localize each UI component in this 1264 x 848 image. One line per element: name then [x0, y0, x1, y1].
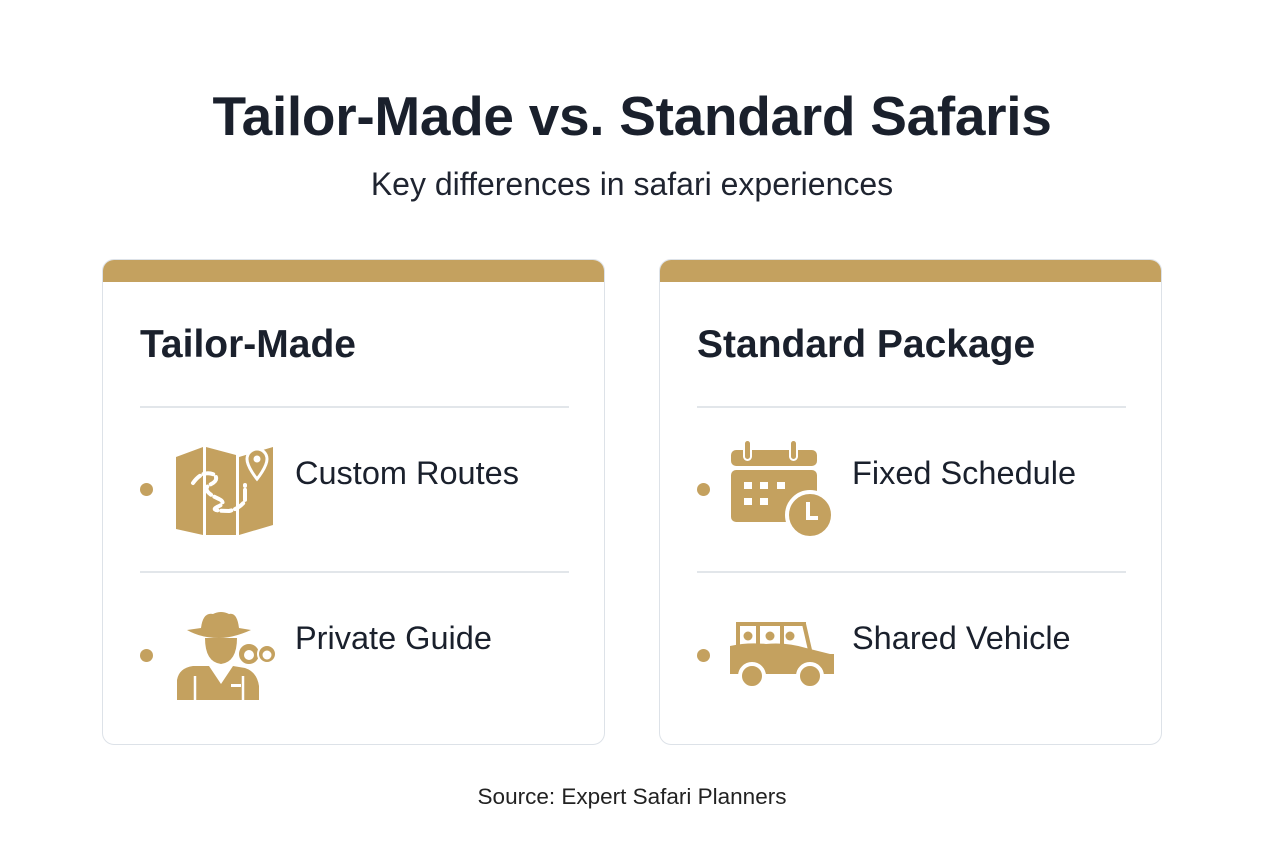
subtitle: Key differences in safari experiences: [371, 166, 893, 202]
icon: guide with binoculars: [177, 612, 275, 700]
bullet: shared vehicle: [697, 649, 710, 662]
icon: calendar with clock: [731, 441, 831, 536]
bullet: custom routes: [140, 483, 153, 496]
label: shared vehicle: Shared Vehicle: [852, 620, 1071, 656]
heading: tailor-made: Tailor-Made: [140, 323, 356, 366]
bullet: fixed schedule: [697, 483, 710, 496]
title: Tailor-Made vs. Standard Safaris: [212, 85, 1052, 147]
bullet: private guide: [140, 649, 153, 662]
label: private guide: Private Guide: [295, 620, 492, 656]
source note: Source: Expert Safari Planners: [478, 784, 786, 809]
icon: safari jeep: [730, 622, 834, 686]
panel: standard package: [659, 259, 1162, 745]
panel: tailor-made: [102, 259, 605, 745]
label: fixed schedule: Fixed Schedule: [852, 455, 1076, 491]
icon: map with route: [176, 447, 273, 535]
label: custom routes: Custom Routes: [295, 455, 519, 491]
heading: standard package: Standard Package: [697, 323, 1035, 366]
